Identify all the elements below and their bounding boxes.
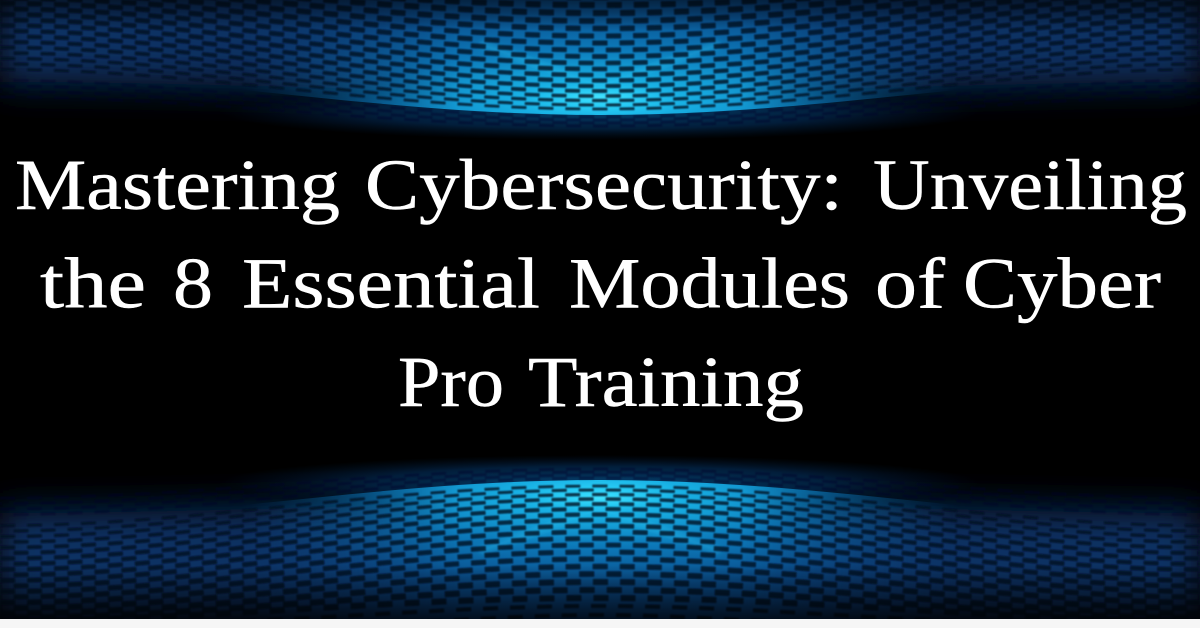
title: of [875,244,945,324]
title: Pro [398,342,504,422]
title: Mastering [15,145,340,225]
bottom light strip [0,619,1200,628]
title: Essential [242,244,540,324]
top edge shading [0,0,1200,30]
title: the [40,244,146,324]
title: Unveiling [873,145,1187,225]
bottom edge shading [0,565,1200,619]
title: 8 [173,244,213,324]
title [15,145,1187,422]
title: Training [528,342,804,422]
title: Cybersecurity: [365,145,843,225]
title: Cyber [963,244,1161,324]
top glowing mesh [0,0,1200,140]
title: Modules [569,244,850,324]
bottom glowing mesh [0,455,1200,625]
